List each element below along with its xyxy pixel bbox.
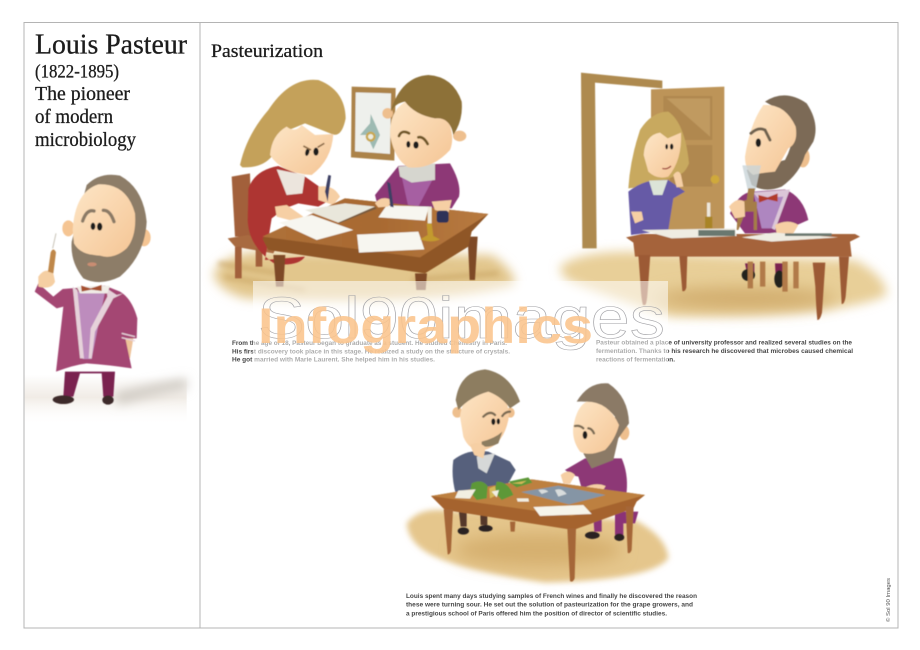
text block: early years [232, 340, 510, 364]
text block: early years: From the age of 18, Pasteur began to graduate as a student. He studied Chemistry in Paris. [232, 340, 507, 347]
watermark: Sol90images [258, 286, 665, 351]
text block: pasteurization: Louis spent many days studying samples of French wines and finally he discovered the reason [406, 593, 697, 600]
text block: fermentation [596, 340, 853, 364]
image credit: © Sol 90 Images [885, 578, 892, 622]
left panel heading: The pioneer [35, 83, 130, 105]
candle [705, 203, 712, 228]
left panel heading [35, 30, 188, 151]
column divider [199, 22, 201, 628]
left panel heading: (1822-1895) [35, 62, 119, 82]
Marie at the door [628, 112, 689, 235]
wine study table [431, 479, 645, 582]
scientist with beard [561, 383, 638, 541]
lab table [626, 228, 860, 320]
watermark [253, 281, 668, 366]
grape leaves and specimen tray [455, 477, 606, 516]
text block: early years: He got married with Marie Laurent. She helped him in his studies. [232, 357, 435, 364]
text block: fermentation: reactions of fermentation. [596, 356, 675, 364]
illustration: Pasteur studying French wine samples [407, 369, 668, 583]
scientist with grapes [452, 369, 520, 535]
illustration: Louis Pasteur portrait [25, 175, 187, 425]
left panel heading: of modern [35, 106, 113, 128]
text block: fermentation: fermentation. Thanks to his research he discovered that microbes caused chemical [596, 348, 853, 355]
man writing [375, 75, 466, 208]
illustration: Pasteur and Marie Laurent writing [213, 75, 515, 301]
text block: early years: His first discovery took place in this stage. He realized a study on the structure of crystals. [232, 348, 510, 355]
papers and book [279, 182, 452, 253]
Pasteur with microscope [729, 95, 816, 292]
left panel heading: Louis Pasteur [35, 30, 188, 60]
text block: pasteurization [406, 593, 697, 618]
woman writing [240, 80, 346, 265]
left panel heading: microbiology [35, 129, 137, 151]
text block: pasteurization: these were turning sour. He set out the solution of pasteurization for the grape growers, and [406, 602, 693, 609]
illustration: Pasteur in laboratory with Marie at the door [560, 73, 887, 320]
writing table [262, 198, 488, 290]
text block: pasteurization: a prestigious school of Paris offered him the position of director of scientific studies. [406, 610, 667, 618]
watermark: Infographics [258, 298, 593, 354]
text block: fermentation: Pasteur obtained a place of university professor and realized several studies on the [596, 340, 853, 346]
heading: Pasteurization: Pasteurization [211, 41, 324, 62]
